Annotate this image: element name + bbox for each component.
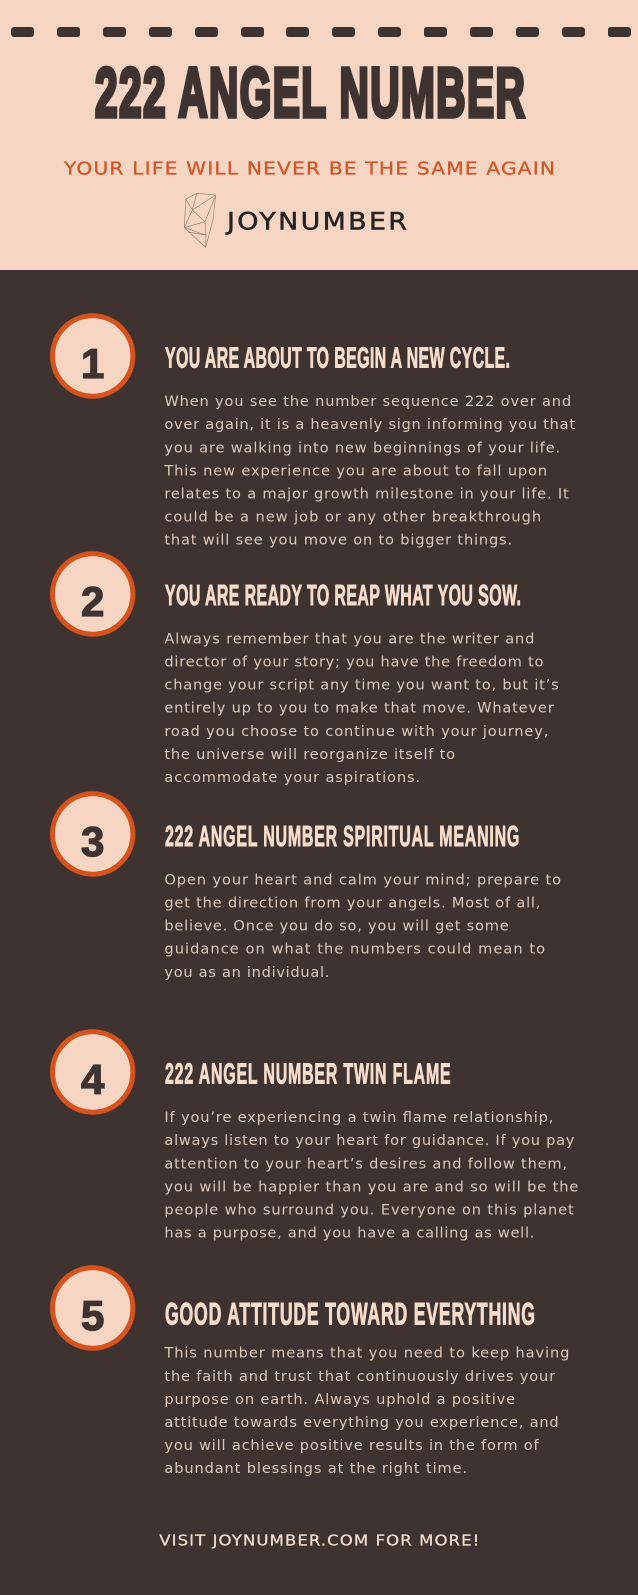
body text 4: people who surround you. Everyone on this planet: [164, 1201, 574, 1218]
logo wordmark: JOYNUMBER: [225, 208, 407, 236]
body text 3: guidance on what the numbers could mean to: [164, 941, 545, 958]
heading 4: 222 ANGEL NUMBER TWIN FLAME: [165, 1058, 451, 1090]
title: 222 ANGEL NUMBER: [95, 54, 525, 132]
body text 4: [164, 1109, 578, 1242]
badge 3: 3: [81, 818, 104, 865]
body text 4: always listen to your heart for guidance. If you pay: [164, 1132, 575, 1149]
body text 2: [164, 630, 559, 786]
heading 5: GOOD ATTITUDE TOWARD EVERYTHING: [165, 1297, 535, 1332]
body text 1: [163, 393, 575, 549]
body text 1: When you see the number sequence 222 over and: [164, 393, 571, 410]
icon: crystal logo: [184, 193, 216, 247]
body text 4: has a purpose, and you have a calling as well.: [164, 1225, 534, 1242]
heading 2: YOU ARE READY TO REAP WHAT YOU SOW.: [165, 579, 521, 611]
body text 1: This new experience you are about to fall upon: [163, 462, 547, 479]
badge 2: 2: [81, 578, 104, 625]
section 1: [52, 316, 575, 549]
body text 5: purpose on earth. Always uphold a positive: [164, 1391, 515, 1408]
body text 2: director of your story; you have the freedom to: [164, 653, 543, 670]
badge 2: [52, 554, 133, 634]
body text 2: entirely up to you to make that move. Whatever: [164, 700, 554, 717]
body text 1: over again, it is a heavenly sign informing you that: [164, 416, 575, 433]
badge 5: 5: [81, 1292, 104, 1339]
body text 3: [164, 871, 561, 981]
body text 1: that will see you move on to bigger things.: [164, 532, 512, 549]
body text 2: road you choose to continue with your journey,: [164, 723, 548, 740]
body text 5: attitude towards everything you experience, and: [164, 1414, 559, 1431]
body text 5: [163, 1345, 569, 1477]
body text 5: the faith and trust that continuously drives your: [164, 1368, 555, 1385]
badge 4: 4: [81, 1056, 105, 1103]
body text 2: Always remember that you are the writer and: [164, 630, 534, 647]
badge 1: [52, 316, 133, 396]
body text 3: get the direction from your angels. Most of all,: [164, 894, 540, 911]
body text 1: you are walking into new beginnings of your life.: [164, 439, 560, 456]
badge 5: [52, 1268, 133, 1348]
footer call to action: VISIT JOYNUMBER.COM FOR MORE!: [159, 1532, 479, 1549]
body text 1: could be a new job or any other breakthrough: [164, 509, 541, 526]
heading 3: 222 ANGEL NUMBER SPIRITUAL MEANING: [165, 820, 519, 852]
body text 4: you will be happier than you are and so will be the: [164, 1178, 578, 1195]
badge 1: 1: [81, 340, 104, 387]
heading 1: YOU ARE ABOUT TO BEGIN A NEW CYCLE.: [165, 341, 510, 374]
body text 2: change your script any time you want to, but it’s: [164, 677, 559, 694]
body text 4: If you’re experiencing a twin flame relationship,: [164, 1109, 553, 1126]
section 4: [52, 1032, 578, 1242]
body text 3: you as an individual.: [164, 964, 329, 981]
section 5: [52, 1268, 569, 1477]
panel: header: [0, 0, 638, 270]
dashed line: [11, 27, 631, 37]
body text 2: accommodate your aspirations.: [164, 769, 420, 786]
body text 5: abundant blessings at the right time.: [164, 1460, 467, 1477]
section 2: [52, 554, 559, 786]
body text 3: believe. Once you do so, you will get some: [164, 918, 509, 935]
body text 2: the universe will reorganize itself to: [164, 746, 455, 763]
body text 5: This number means that you need to keep having: [163, 1345, 569, 1362]
body text 4: attention to your heart’s desires and follow them,: [164, 1155, 567, 1172]
section 3: [52, 794, 561, 981]
subtitle: YOUR LIFE WILL NEVER BE THE SAME AGAIN: [63, 157, 555, 179]
body text 3: Open your heart and calm your mind; prepare to: [164, 871, 561, 888]
body text 1: relates to a major growth milestone in your life. It: [164, 486, 569, 503]
body text 5: you will achieve positive results in the form of: [164, 1437, 540, 1454]
badge 3: [52, 794, 133, 874]
badge 4: [52, 1032, 133, 1112]
